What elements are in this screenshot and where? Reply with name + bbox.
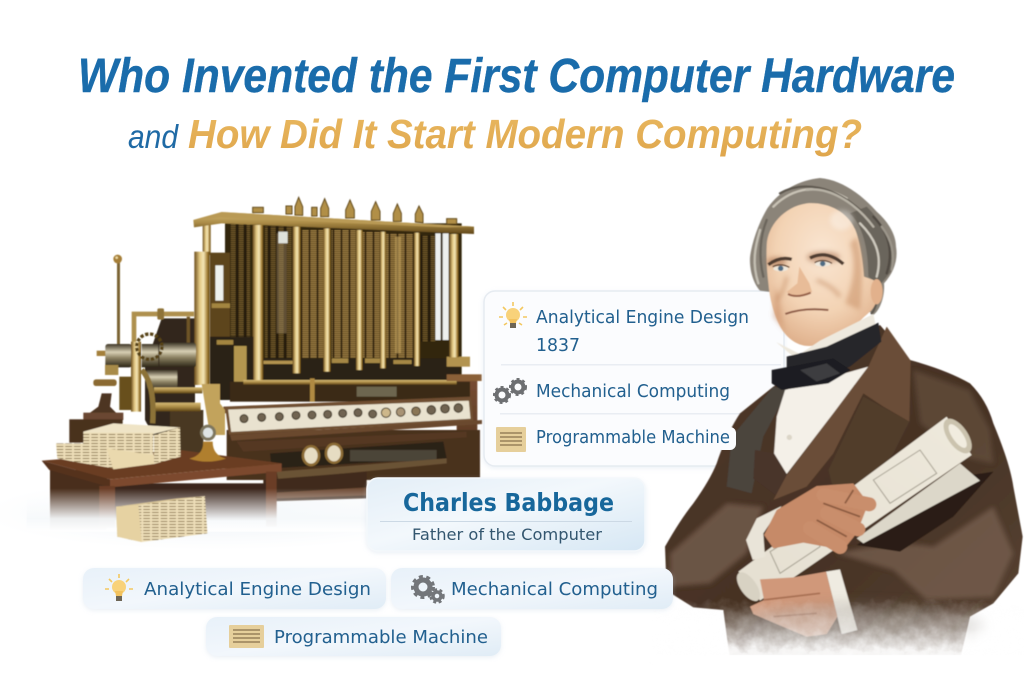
lower hand [750, 572, 837, 637]
coat highlights [670, 370, 1013, 600]
dark lapel left [727, 387, 788, 493]
icon: punched card [496, 427, 526, 452]
top beam [193, 212, 474, 234]
pill label: Mechanical Computing [451, 579, 658, 600]
pill: Analytical Engine Design [83, 568, 386, 609]
pill: Mechanical Computing [391, 568, 673, 609]
number wheel stacks [230, 223, 470, 382]
wooden cabinet [202, 374, 482, 482]
bow [772, 358, 851, 390]
dial control panel [227, 399, 482, 452]
eyebrows [768, 255, 843, 265]
icon: light bulb [499, 302, 527, 328]
nose and mouth [787, 267, 812, 296]
label: Analytical Engine Design 1837 [536, 308, 749, 356]
left frame and window [210, 253, 230, 386]
waistcoat [753, 447, 817, 498]
brass bell instrument [189, 425, 226, 462]
loose card box [116, 496, 207, 542]
title [78, 50, 955, 157]
lower body grey wash [737, 603, 983, 650]
title word: and: and [128, 118, 179, 155]
portrait base fade [653, 600, 1024, 663]
hair back [750, 178, 897, 315]
face shading [767, 210, 862, 333]
cravat [787, 323, 881, 387]
eyes [773, 266, 788, 271]
lower wood rail [263, 472, 367, 502]
brass columns [203, 225, 459, 382]
engine cylinders [93, 334, 202, 423]
panel: milestones card [484, 291, 784, 466]
machine frame back [225, 223, 462, 383]
table [42, 419, 282, 530]
label: Analytical Engine Design 1837: Analytical Engine Design [536, 308, 749, 328]
label: Analytical Engine Design 1837: 1837 [536, 336, 580, 356]
panel: name plate [367, 478, 645, 551]
face [766, 203, 878, 346]
upper hand [764, 483, 869, 550]
cuff upper [746, 506, 782, 560]
small stand [88, 393, 117, 414]
coat [665, 325, 1023, 660]
hair strands [755, 187, 893, 313]
engine dark mass [145, 318, 195, 453]
lower drawer with knobs [270, 442, 447, 480]
white halo behind text [716, 427, 736, 450]
finials [253, 197, 457, 224]
rolled paper back sheet [857, 463, 980, 543]
engine pipes [134, 314, 194, 347]
cuff lower [826, 569, 857, 634]
icon: light bulb [105, 574, 133, 601]
machine base fade [27, 488, 373, 532]
ear [871, 279, 883, 304]
label: Mechanical Computing: Mechanical Computing [536, 382, 730, 402]
coat shadow under roll [857, 472, 993, 552]
title line 2: How Did It Start Modern Computing? [188, 111, 862, 157]
subtitle: Father of the Computer [412, 525, 602, 544]
lever rod [113, 255, 122, 348]
pill label: Analytical Engine Design [144, 579, 371, 600]
illustration: Analytical Engine machine [0, 197, 482, 550]
icon: gears [494, 379, 526, 403]
icon: gears [412, 576, 444, 602]
portrait base clean edge [653, 655, 1024, 675]
rolled plans [738, 417, 972, 601]
pill: Programmable Machine [206, 617, 501, 656]
pill label: Programmable Machine [274, 627, 488, 648]
ground fog [0, 477, 450, 550]
shirt [774, 367, 868, 474]
panel: milestone labels [494, 302, 749, 452]
label: Programmable Machine: Programmable Machine [536, 428, 730, 448]
name: Charles Babbage [403, 488, 614, 517]
punched card stacks [56, 423, 181, 469]
lapel right [773, 327, 911, 500]
collar [776, 314, 876, 357]
icon: punched card [229, 625, 264, 648]
illustration: Charles Babbage portrait [653, 178, 1024, 675]
